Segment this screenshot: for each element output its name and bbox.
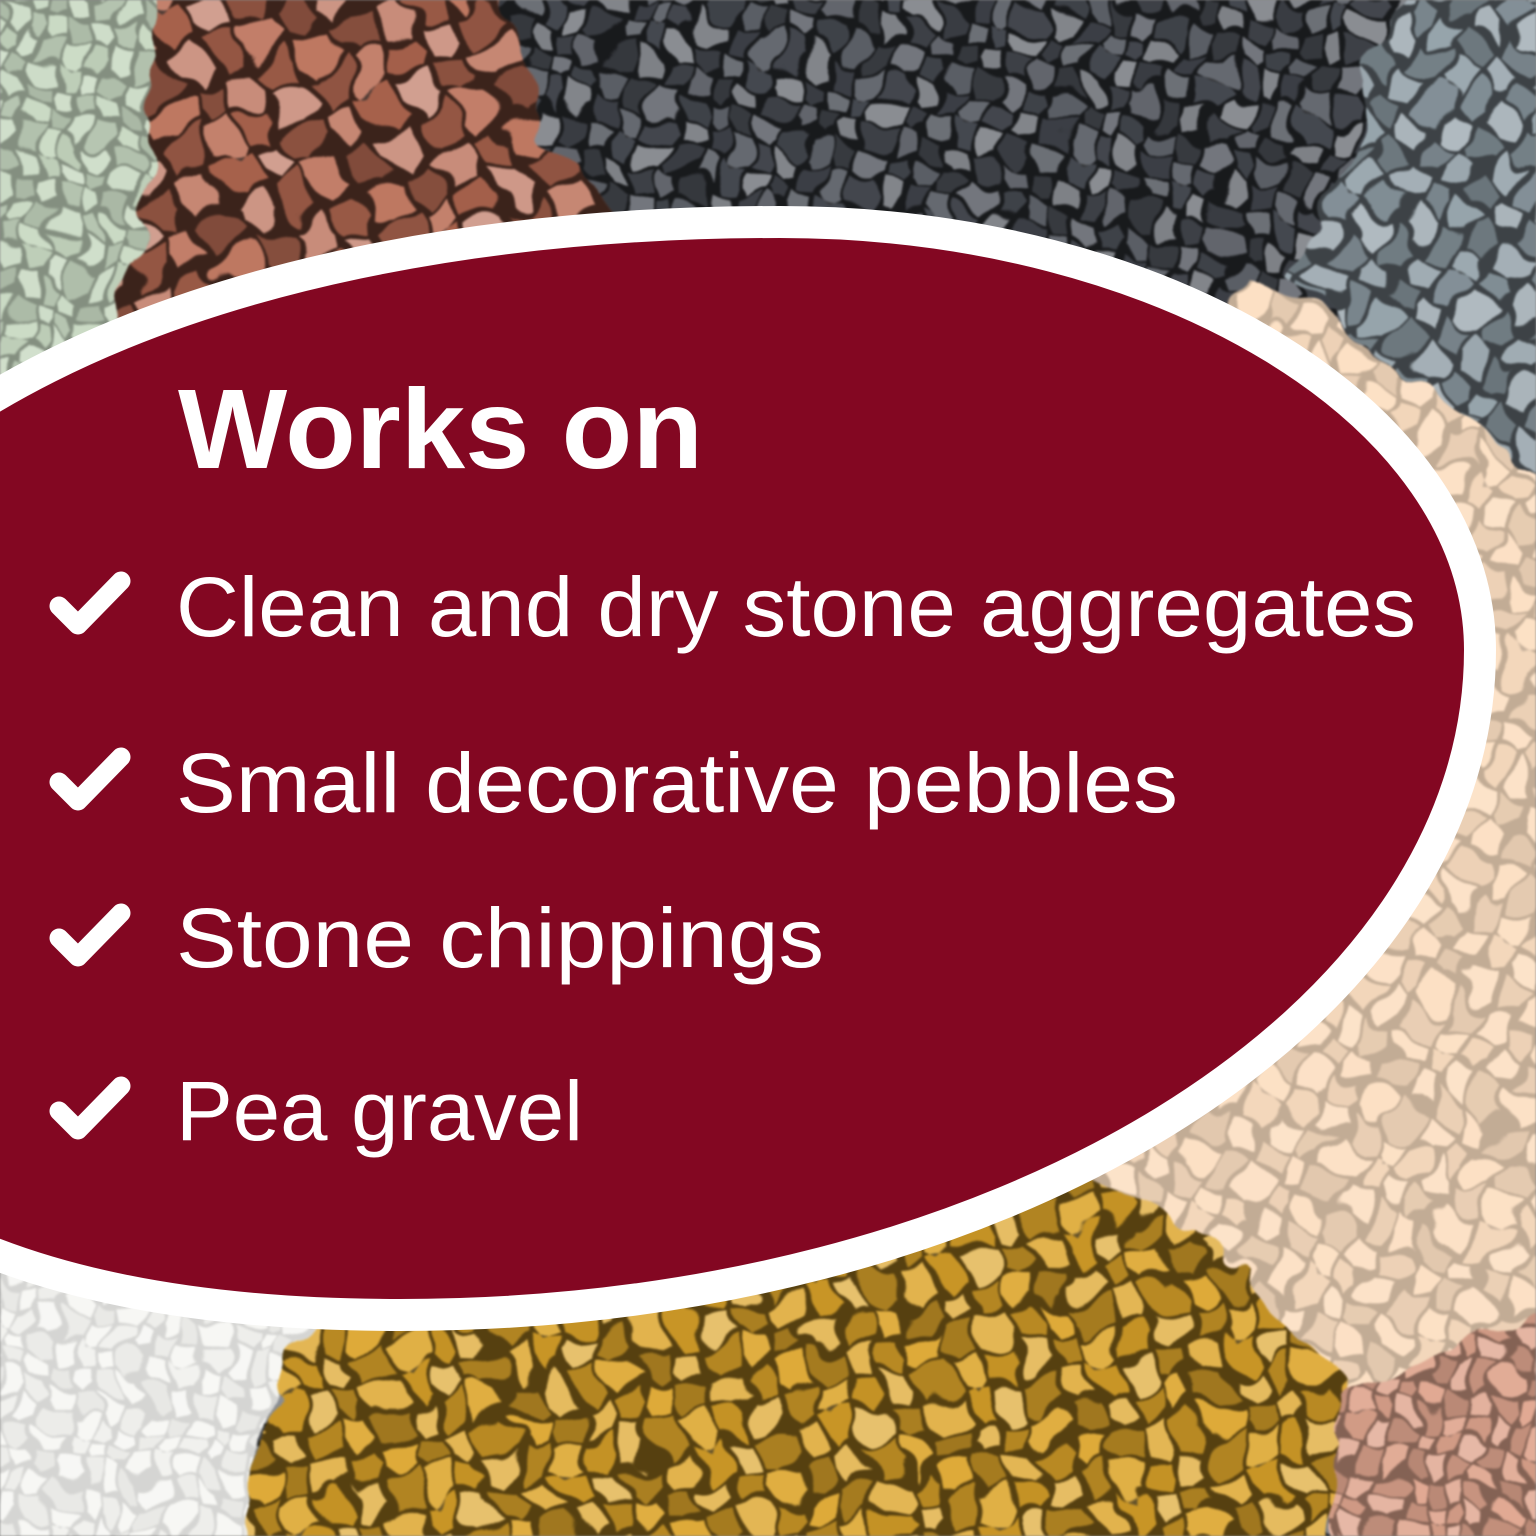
gravel: pale green stones [0,0,160,500]
list item: stone chippings [59,891,824,985]
icon: check mark 2 [59,757,121,801]
list item: small decorative pebbles [59,736,1178,830]
icon: check mark 3 [59,913,121,957]
heading: Works on: Works on [178,366,703,492]
text: item 3: Stone chippings [176,891,824,985]
text: item 1: Clean and dry stone aggregates [176,560,1416,654]
icon: check mark 4 [59,1086,121,1130]
panel: red oval with white border [0,222,1480,1315]
gravel: red-brown stones [100,0,610,500]
gravel: blue-grey stones [1290,0,1536,520]
list item: clean and dry stone aggregates [59,560,1416,654]
gravel: peach stones [1000,280,1536,1400]
text: item 4: Pea gravel [176,1064,583,1158]
gravel: ochre yellow stones [225,1000,1375,1536]
gravel: pink stones [1330,1290,1536,1536]
icon: check mark 1 [59,581,121,625]
list item: pea gravel [59,1064,583,1158]
text: item 2: Small decorative pebbles [176,736,1178,830]
gravel: white stones [0,1200,340,1536]
